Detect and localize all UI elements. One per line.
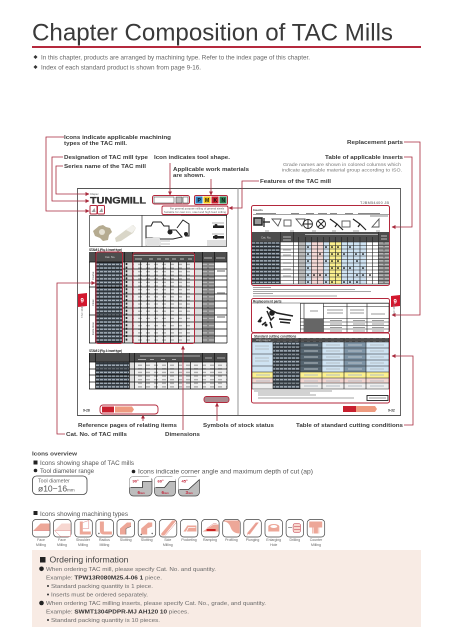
annotation: features of the TAC mill: Features of the TAC mill: [260, 179, 331, 185]
annotation: series name: [56, 164, 146, 194]
title: Chapter Composition of TAC Mills: [32, 20, 393, 46]
column: Dimensions: [133, 262, 194, 343]
annotation: table of applicable inserts: Grade names are shown in colored columns which: [283, 162, 402, 167]
section: icons showing shape: Icons indicate corner angle and maximum depth of cut (ap): [138, 470, 313, 476]
annotation: reference pages: Reference pages of relating items: [78, 423, 177, 429]
icon: tool diameter range: [32, 476, 87, 494]
icon: face milling: [32, 520, 50, 537]
icon: ramping: [202, 520, 219, 537]
table: tool dimensions 1: Close: [91, 299, 95, 306]
annotation: icons indicate applicable machining types: [46, 135, 172, 211]
text: ordering TAC mills: Standard packing quantity is 1 piece.: [51, 584, 153, 590]
annotation: table of standard cutting conditions: Table of standard cutting conditions: [296, 423, 403, 429]
labels: machining types: Milling: [163, 543, 173, 547]
labels: machining types: Hole: [270, 543, 277, 547]
panel: replacement parts: [252, 298, 390, 332]
side tab: right page chapter marker: [391, 295, 400, 316]
annotation: reference pages: [78, 415, 177, 429]
column: Cat. No.: Cat. No.: [105, 255, 115, 259]
icon: work material groups P M K N: N: [222, 198, 226, 204]
logo: TUNGMILL: TUNGMILL: [90, 196, 146, 206]
labels: machining types: Profiling: [225, 538, 238, 542]
table: tool dimensions 1: [89, 252, 227, 343]
annotation: icon indicates tool shape: [154, 155, 230, 195]
annotation: designation of TAC mill type: [52, 155, 148, 201]
icon row: insert shapes: [254, 218, 379, 230]
text: ordering TAC mills: When ordering TAC mill, please specify Cat. No. and quantity.: [46, 567, 216, 573]
icon: milling cutter photo: [93, 225, 112, 241]
symbol: stock status: [204, 396, 229, 402]
annotation: table of applicable inserts: indicate applicable material group according to ISO.: [282, 168, 402, 172]
side tab: left page chapter marker: TAC Mills: [80, 305, 84, 318]
labels: machining types: Side: [164, 538, 171, 542]
heading: icons showing machining types: Icons showing machining types: [40, 512, 128, 518]
annotation: Cat. No. of TAC mills: Cat. No. of TAC mills: [66, 432, 127, 438]
panel: left page footer: [83, 396, 229, 414]
icon: corner angle 60 degrees: [154, 476, 176, 496]
annotation: applicable work materials: [173, 167, 249, 195]
panel: left catalogue page header: Chapter: [90, 193, 99, 196]
icon: work material groups P M K N: [194, 196, 228, 204]
callout boxes on left table: [96, 252, 194, 344]
heading: table 1: STAMI 1 (Fig. 4: insert type): [89, 248, 122, 252]
heading: table 2: STAMI 2 (Fig. 4: insert type): [89, 349, 122, 353]
icon: corner angle 45 degrees: [178, 476, 200, 496]
annotation: icons indicate applicable machining types: types of the TAC mill.: [64, 141, 127, 147]
icon: corner angle 90 degrees: 6mm: [138, 490, 145, 495]
icon: shoulder milling: [75, 520, 92, 537]
labels: machining types: Milling: [99, 543, 109, 547]
labels: machining types: Milling: [311, 543, 321, 547]
icon: work material groups P M K N: K: [214, 198, 218, 204]
icon: side milling: [159, 520, 177, 537]
icon: radius milling: [96, 520, 113, 537]
text: ordering inserts: Standard packing quantity is 10 pieces.: [51, 618, 160, 624]
panel: ordering information: [32, 550, 421, 627]
annotation: features of the TAC mill: [229, 179, 331, 208]
callout: reference pages: [100, 405, 158, 414]
callout: features box: [162, 206, 228, 214]
callout: features box: Suitable for cast iron, steel and high feed milling: [164, 210, 227, 214]
icon: profiling: [223, 520, 240, 537]
labels: machining types: Radius: [99, 538, 110, 542]
icon: corner angle 60 degrees: 60°: [158, 478, 164, 484]
text: ordering TAC mills: Example: TPW13R080M25.4-06 1 piece.: [46, 576, 162, 582]
page frame: sample spread: [78, 188, 400, 416]
labels: machining types: Plunging: [246, 538, 259, 542]
notes under insert table: [253, 288, 371, 296]
icon: plunging: [244, 520, 261, 537]
intro bullet list: [34, 55, 310, 72]
annotation: applicable work materials: are shown.: [173, 173, 205, 179]
annotation: designation of TAC mill type: Designation of TAC mill type: [64, 155, 148, 161]
labels: machining types: Ramping: [203, 538, 217, 542]
icon: enlarging hole: [265, 520, 282, 537]
intro bullet list: Index of each standard product is shown from page 9-16.: [41, 66, 201, 72]
text: ordering inserts: [39, 601, 266, 624]
intro bullet list: In this chapter, products are arranged by machining type. Refer to the index page of this chapter.: [41, 56, 310, 62]
annotation: series name: Series name of the TAC mill: [64, 164, 146, 170]
icon: tool diameter range: Tool diameter: [38, 478, 70, 484]
table: tool dimensions 1: Coarse: [91, 271, 95, 280]
annotation: replacement parts: [347, 140, 420, 315]
annotation: dimensions: [165, 346, 200, 438]
labels: machining types: Milling: [57, 543, 67, 547]
annotation: replacement parts: Replacement parts: [347, 140, 403, 146]
icon: insert side views: [212, 223, 224, 234]
icon: drilling: [286, 520, 304, 537]
icon: slotting round: [138, 520, 156, 537]
icon: corner angle 90 degrees: [130, 476, 152, 496]
icon: corner angle 60 degrees: 6mm: [162, 490, 169, 495]
section: icons showing shape: Icons showing shape of TAC mills: [40, 461, 134, 467]
heading: ordering information: Ordering information: [50, 556, 128, 564]
annotation: icon indicates tool shape: Icon indicates tool shape.: [154, 155, 230, 161]
panel: right page footer: [343, 406, 395, 412]
annotation: applicable work materials: Applicable work materials: [173, 167, 249, 173]
section: icons showing shape: [34, 460, 313, 476]
code label: TJBM54400 JB: [360, 201, 389, 205]
side tab: right page chapter marker: 9: [394, 300, 398, 306]
labels: machining types: Counter: [310, 538, 323, 542]
panel: left catalogue page header: [90, 193, 228, 218]
annotation: icons indicate applicable machining types: Icons indicate applicable machining: [64, 135, 172, 141]
text: ordering TAC mills: Inserts must be ordered separately.: [51, 592, 148, 598]
icon: tool diameter range: ø10−16mm: [38, 484, 75, 494]
drawing: cutter cross-section: [146, 220, 189, 239]
panel: standard cutting conditions: [252, 333, 390, 403]
icon row: machining types: [32, 520, 325, 537]
annotation: symbols of stock status: [203, 403, 274, 429]
icon: corner angle 45 degrees: 3mm: [186, 490, 193, 495]
labels: machining types: Milling: [36, 543, 46, 547]
icon: corner angle 45 degrees: 45°: [182, 478, 188, 484]
table: parts list: [300, 304, 389, 332]
table: tool dimensions 1: Extra close: [91, 322, 95, 335]
labels: machining types: Slotting: [120, 538, 132, 542]
labels: machining types: [36, 538, 323, 547]
icon: pocketing: [180, 520, 198, 537]
table: cutting conditions: Work material: [256, 339, 271, 342]
panel: right page footer: 9-32: [388, 408, 395, 412]
panel: left page footer: 9-28: [83, 408, 90, 412]
section: icons showing shape: Tool diameter range: [40, 469, 95, 475]
table: applicable inserts: Cat. No.: [261, 236, 271, 240]
icon: slotting: [117, 520, 134, 537]
icon: work material groups P M K N: M: [205, 198, 209, 204]
labels: machining types: Milling: [78, 543, 88, 547]
annotation: table of applicable inserts: Table of applicable inserts: [325, 155, 403, 161]
table: tool dimensions 2: [89, 353, 227, 389]
callout: features box: For general purpose milling of general steels: [170, 206, 225, 210]
panel: product photo and drawing: [90, 215, 226, 247]
annotation: table of standard cutting conditions: [296, 356, 413, 429]
text: ordering inserts: When ordering TAC milling inserts, please specify Cat. No., grade, and quantity.: [46, 601, 266, 607]
drawing: exploded parts: [258, 307, 293, 328]
annotation: dimensions: Dimensions: [165, 432, 200, 438]
text: ordering TAC mills: [39, 566, 216, 598]
labels: machining types: Face: [58, 538, 66, 542]
icon: counter milling: [307, 520, 325, 537]
labels: machining types: Drilling: [289, 538, 300, 542]
panel: right catalogue page inserts: [252, 201, 390, 286]
icon: work material groups P M K N: P: [198, 198, 202, 204]
panel: replacement parts: Replacement parts: [253, 300, 282, 304]
annotation: table of applicable inserts: [282, 155, 412, 227]
text: ordering inserts: Example: SWMT1304PDPR-MJ AH120 10 pieces.: [46, 610, 189, 616]
annotation: Cat. No. of TAC mills: [57, 283, 127, 438]
icon: face milling 2: [54, 520, 71, 537]
heading: icons overview: Icons overview: [32, 452, 78, 458]
labels: machining types: Shoulder: [76, 538, 91, 542]
panel: right catalogue page inserts: Inserts: [253, 208, 263, 212]
labels: machining types: Face: [37, 538, 45, 542]
icon: corner angle 90 degrees: 90°: [132, 478, 139, 484]
labels: machining types: Enlarging: [266, 538, 281, 542]
panel: standard cutting conditions: Standard cutting conditions: [254, 334, 297, 338]
side tab: right page chapter marker: TAC Mills: [392, 303, 396, 316]
labels: machining types: Pocketing: [181, 538, 197, 542]
labels: machining types: Slotting: [141, 538, 153, 542]
annotation: symbols of stock status: Symbols of stock status: [203, 423, 274, 429]
side tab: left page chapter marker: 9: [80, 298, 84, 304]
side tab: left page chapter marker: [78, 293, 87, 318]
